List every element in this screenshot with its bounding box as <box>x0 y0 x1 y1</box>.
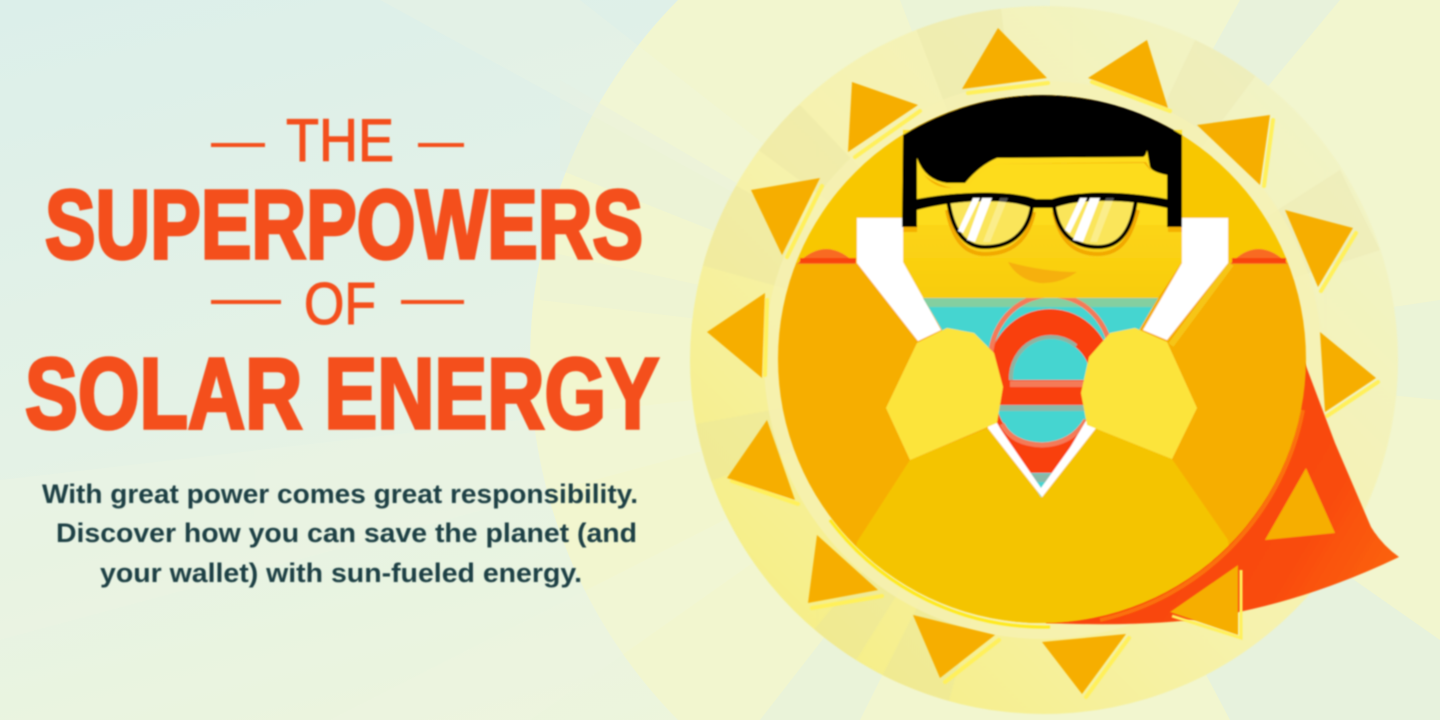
cape inner glow <box>1100 410 1303 620</box>
sun edge highlight <box>830 520 1050 627</box>
halo rays <box>934 10 1346 185</box>
inner pale ring <box>764 81 1322 639</box>
hair <box>902 95 1182 227</box>
left background light rays <box>0 0 1040 720</box>
sun hero character <box>778 90 1306 640</box>
the: THE <box>286 107 394 174</box>
sun ray triangles <box>707 28 1378 697</box>
the right dash <box>418 143 464 147</box>
sun halo <box>680 0 1398 715</box>
glasses <box>917 193 1167 254</box>
triangle <box>1170 565 1238 635</box>
left fist <box>886 328 1003 460</box>
right shoulder <box>1230 249 1288 264</box>
white collar <box>988 424 1096 497</box>
chest emblem <box>923 295 1158 503</box>
of left dash <box>211 300 281 304</box>
background sun rays <box>540 0 1440 720</box>
right fist <box>1081 328 1197 459</box>
of: OF <box>304 271 376 337</box>
lower body <box>856 428 1229 624</box>
subtitle <box>42 479 638 588</box>
bottom right ray triangle <box>1170 565 1241 638</box>
glasses shadow <box>947 210 1138 254</box>
left white strap <box>857 218 941 341</box>
lens glare <box>958 198 980 233</box>
triangle highlights <box>732 82 1378 697</box>
upper head area <box>796 95 1288 624</box>
right white strap <box>1143 218 1228 340</box>
shoulder stripes <box>800 258 1286 263</box>
forehead <box>917 163 1167 225</box>
face <box>903 130 1182 298</box>
right strap edge <box>1171 264 1231 345</box>
left shoulder <box>797 249 856 264</box>
mouth <box>1008 262 1077 283</box>
hair shadow <box>903 162 1182 232</box>
of right dash <box>401 300 464 304</box>
solar energy: SOLAR ENERGY <box>25 338 659 450</box>
the left dash <box>211 143 265 147</box>
cape inner triangle <box>1265 468 1335 540</box>
subtitle: Discover how you can save the planet (and <box>56 518 637 548</box>
cape <box>1042 350 1399 624</box>
outer glow circle <box>530 0 1440 720</box>
superpowers: SUPERPOWERS <box>45 170 643 279</box>
subtitle: With great power comes great responsibility. <box>42 479 638 509</box>
subtitle: your wallet) with sun-fueled energy. <box>100 558 582 588</box>
sun body <box>778 95 1306 623</box>
title <box>25 107 659 450</box>
triangle highlight <box>1172 570 1241 638</box>
